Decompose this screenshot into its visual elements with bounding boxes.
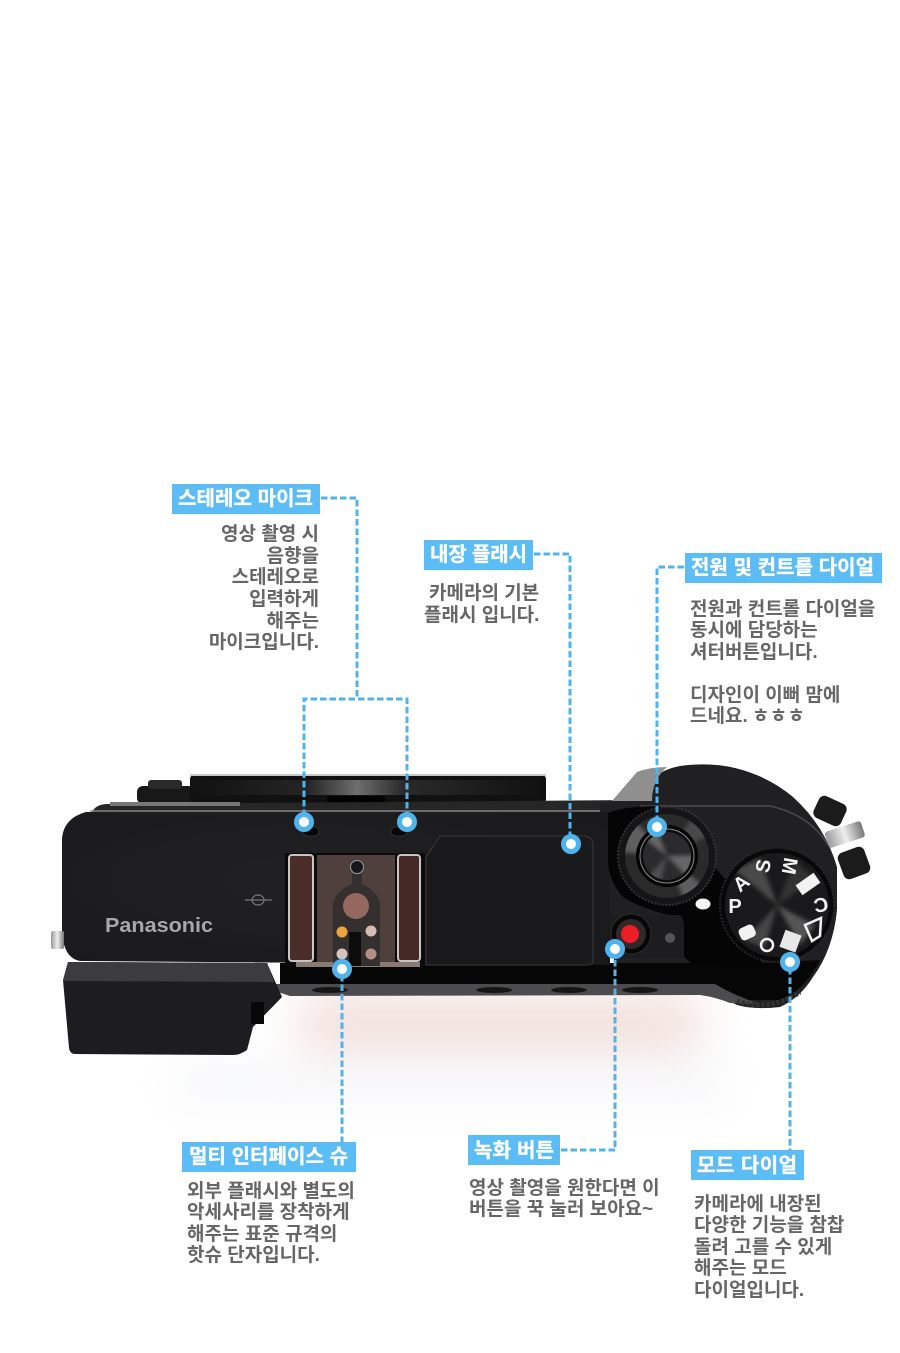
leader lines xyxy=(304,498,790,1150)
panel: multi interface shoe xyxy=(182,1142,356,1266)
power indicator mark xyxy=(696,898,710,910)
shutter button sheen xyxy=(647,836,691,880)
heading: multi interface shoe: 멀티 인터페이스 슈 xyxy=(189,1145,348,1168)
camera body xyxy=(51,764,872,1055)
text: record button description: 버튼을 꾹 눌러 보아요~ xyxy=(469,1198,653,1220)
heading: power and control dial: 전원 및 컨트롤 다이얼 xyxy=(691,556,874,579)
text: built-in flash description: 플래시 입니다. xyxy=(424,604,539,626)
strap lug xyxy=(811,794,872,881)
heading: stereo microphone xyxy=(172,484,320,514)
black lower band xyxy=(280,960,820,1000)
text: multi interface shoe description: 해주는 표준 규격의 xyxy=(187,1223,337,1245)
camera infographic xyxy=(51,484,882,1298)
bottom rail xyxy=(272,984,760,1004)
dial knurl xyxy=(737,992,800,1005)
text: multi interface shoe description: 외부 플래시와 별도의 xyxy=(187,1180,355,1202)
flash door xyxy=(426,836,593,965)
marker: flash xyxy=(564,836,578,852)
text: mode dial description: 돌려 고를 수 있게 xyxy=(694,1236,832,1258)
text: power and control dial description xyxy=(690,598,875,727)
text: mode dial description: 해주는 모드 xyxy=(694,1257,787,1279)
hot shoe xyxy=(285,853,425,967)
text: power and control dial description: 셔터버튼입니다. xyxy=(690,641,818,663)
text: stereo microphone description: 영상 촬영 시 xyxy=(221,523,319,545)
dial ring highlights xyxy=(625,820,705,896)
heading: mode dial: 모드 다이얼 xyxy=(697,1154,797,1177)
mode dial letters: M xyxy=(777,856,801,876)
panel: record button xyxy=(468,1135,660,1220)
mode dial xyxy=(720,848,834,962)
marker: right stereo microphone xyxy=(400,814,414,830)
mode dial letters: S xyxy=(752,858,776,875)
text: power and control dial description: ㅎㅎㅎ xyxy=(752,706,805,727)
top dial behind the body xyxy=(137,780,197,804)
marker: left stereo microphone xyxy=(296,814,312,830)
text: stereo microphone description: 마이크입니다. xyxy=(209,631,319,653)
heading: built-in flash: 내장 플래시 xyxy=(430,543,527,566)
mode dial letters: C xyxy=(812,892,830,916)
marker: power dial xyxy=(650,820,664,834)
text: mode dial description: 다이얼입니다. xyxy=(694,1279,804,1301)
text: built-in flash description xyxy=(424,582,539,626)
text: record button description: 영상 촬영을 원한다면 이 xyxy=(469,1177,660,1199)
text: power and control dial description: 전원과 컨트롤 다이얼을 xyxy=(690,598,875,620)
heading: multi interface shoe xyxy=(182,1142,356,1172)
text: record button description xyxy=(469,1177,660,1220)
text: power and control dial description: 동시에 담당하는 xyxy=(690,619,818,641)
panel: mode dial xyxy=(691,1150,844,1301)
heading: stereo microphone: 스테레오 마이크 xyxy=(178,487,313,510)
panel: stereo microphone xyxy=(172,484,320,653)
marker: mode dial xyxy=(782,954,798,970)
heading: record button: 녹화 버튼 xyxy=(474,1139,554,1162)
text: stereo microphone description: 해주는 xyxy=(267,610,319,632)
text: stereo microphone description xyxy=(209,523,319,653)
text: multi interface shoe description: 핫슈 단자입니다. xyxy=(187,1244,320,1266)
grip light wedge xyxy=(612,767,667,801)
microphone holes xyxy=(303,827,407,836)
left body plate xyxy=(62,812,610,965)
text: power and control dial description: 드네요. xyxy=(690,705,748,727)
text: power and control dial description: 디자인이 이뻐 맘에 xyxy=(690,684,840,706)
text: stereo microphone description: 음향을 xyxy=(267,545,319,567)
panel: built-in flash xyxy=(424,540,539,626)
bottom rail screw marks xyxy=(312,987,658,993)
heading: mode dial xyxy=(691,1150,804,1180)
mode dial letters: A xyxy=(729,871,754,897)
heading: power and control dial xyxy=(685,553,882,583)
mode dial letters xyxy=(728,856,830,953)
heading: record button xyxy=(468,1135,560,1165)
text: mode dial description: 다양한 기능을 참찹 xyxy=(694,1214,844,1236)
record button xyxy=(610,914,684,958)
marker: hot shoe xyxy=(334,962,350,976)
battery grip xyxy=(63,962,282,1055)
sensor plane mark xyxy=(245,895,272,905)
text: stereo microphone description: 스테레오로 xyxy=(232,566,319,588)
power and control dial xyxy=(617,806,717,906)
brand logo: Panasonic xyxy=(105,915,213,937)
text: mode dial description: 카메라에 내장된 xyxy=(694,1193,822,1215)
upper body strip xyxy=(92,800,640,815)
marker: record button xyxy=(608,942,622,956)
dial metal sheen xyxy=(735,858,815,948)
text: multi interface shoe description xyxy=(187,1180,355,1266)
soft shadow beneath camera xyxy=(170,998,730,1100)
text: built-in flash description: 카메라의 기본 xyxy=(429,582,539,604)
black recess around dials xyxy=(608,806,765,967)
right grip xyxy=(600,764,837,1008)
lens mount ring xyxy=(190,774,546,804)
text: mode dial description xyxy=(694,1193,844,1301)
panel: power and control dial xyxy=(685,553,882,727)
mode dial letters: P xyxy=(728,896,742,918)
left side lug xyxy=(51,931,64,949)
text: multi interface shoe description: 악세사리를 장착하게 xyxy=(187,1201,350,1223)
text: stereo microphone description: 입력하게 xyxy=(249,588,319,610)
